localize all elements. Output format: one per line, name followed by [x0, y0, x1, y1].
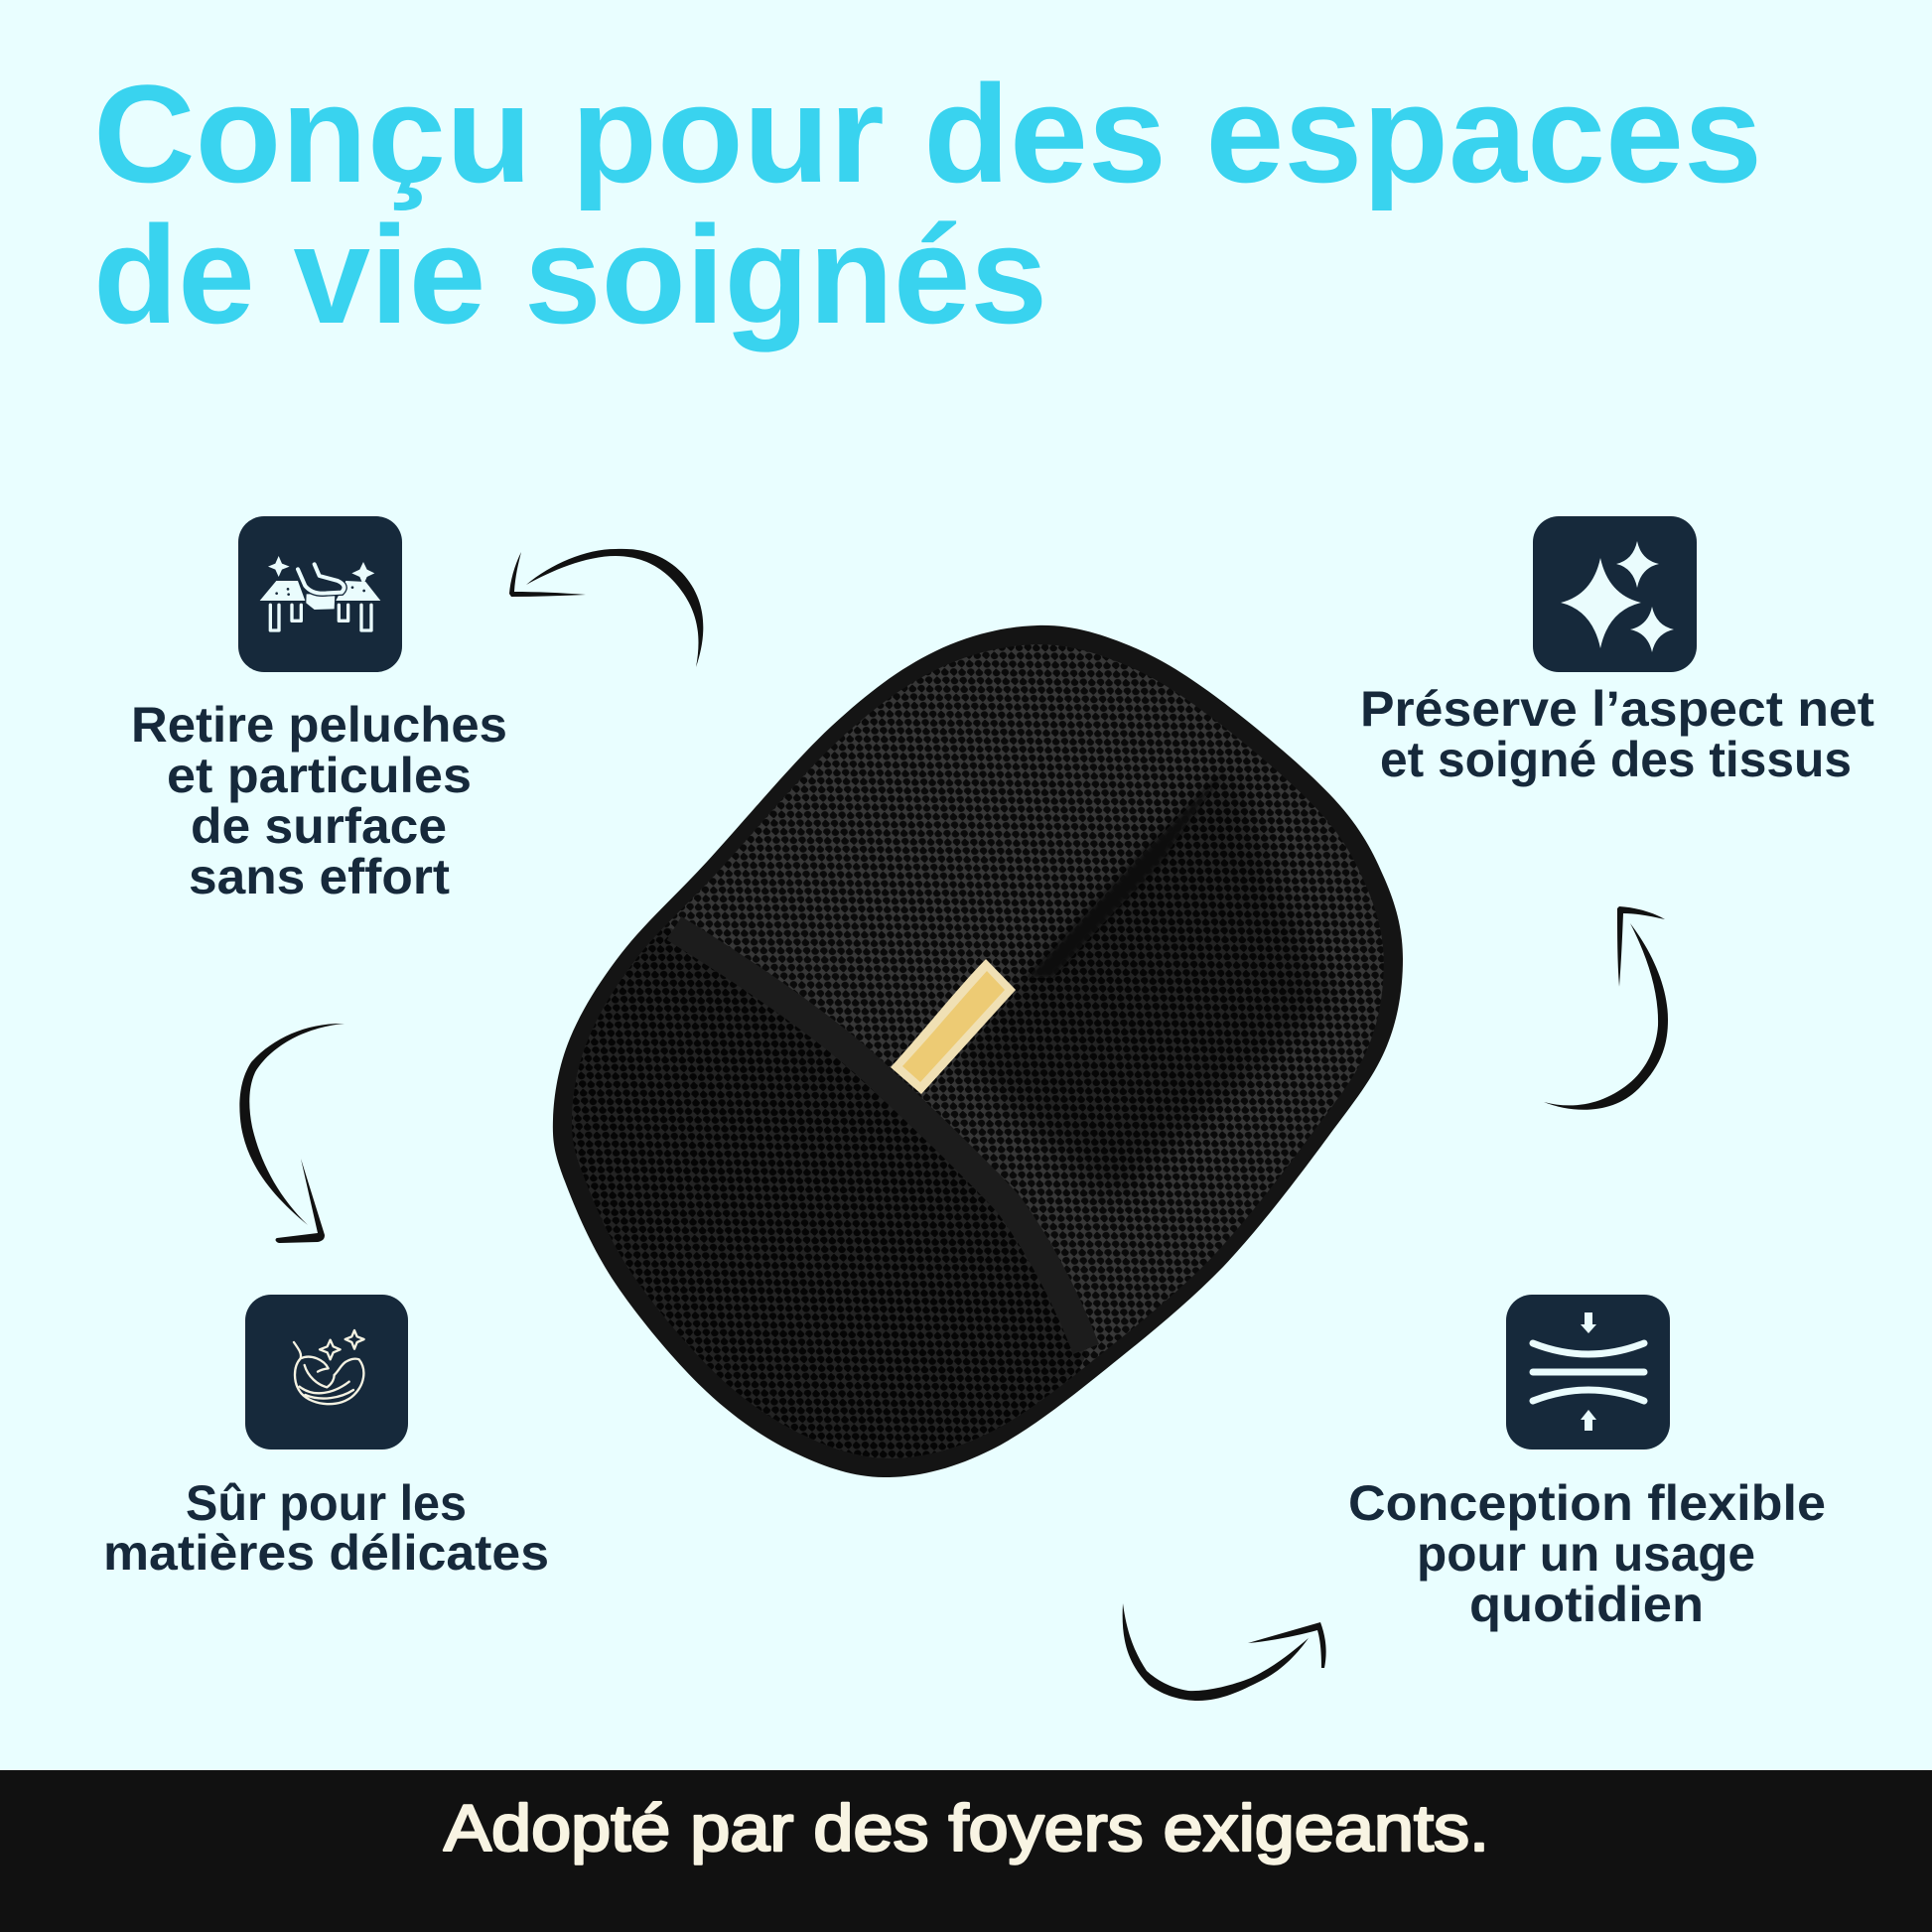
text: retire peluches: de surface	[191, 798, 447, 854]
text: conception flexible: pour un usage	[1417, 1526, 1755, 1582]
arrow: top left	[509, 549, 703, 667]
title: Conçu pour des espaces	[93, 56, 1762, 211]
text: sur pour les matieres	[103, 1475, 549, 1581]
product: black mesh mitt	[552, 625, 1403, 1477]
text: retire peluches: et particules	[167, 748, 472, 803]
text: conception flexible: quotidien	[1469, 1577, 1704, 1632]
text: conception flexible: Conception flexible	[1348, 1475, 1826, 1531]
title: de vie soignés	[93, 197, 1047, 352]
text: preserve: Préserve l’aspect net	[1360, 681, 1874, 737]
text: sur pour les matieres: matières délicates	[103, 1525, 549, 1581]
footer band	[0, 1770, 1932, 1932]
text: preserve	[1360, 681, 1874, 787]
footer text: Adopté par des foyers exigeants.	[444, 1791, 1489, 1864]
text: preserve: et soigné des tissus	[1380, 732, 1852, 787]
pocket band	[674, 928, 1086, 1349]
icon: feather and stars	[245, 1295, 408, 1449]
text: retire peluches: Retire peluches	[131, 697, 507, 753]
text: retire peluches	[131, 697, 507, 904]
arrow: right	[1544, 906, 1668, 1110]
yellow pull tab	[891, 959, 1016, 1094]
text: conception flexible	[1348, 1475, 1826, 1632]
arrow: bottom right	[1123, 1603, 1326, 1701]
text: retire peluches: sans effort	[189, 849, 450, 904]
title	[93, 56, 1762, 352]
icon: table cleaning	[238, 516, 402, 672]
arrow: left	[239, 1024, 345, 1243]
text: sur pour les matieres: Sûr pour les	[186, 1475, 467, 1531]
icon: sparkles	[1533, 516, 1697, 672]
icon: flexible compression	[1506, 1295, 1670, 1449]
